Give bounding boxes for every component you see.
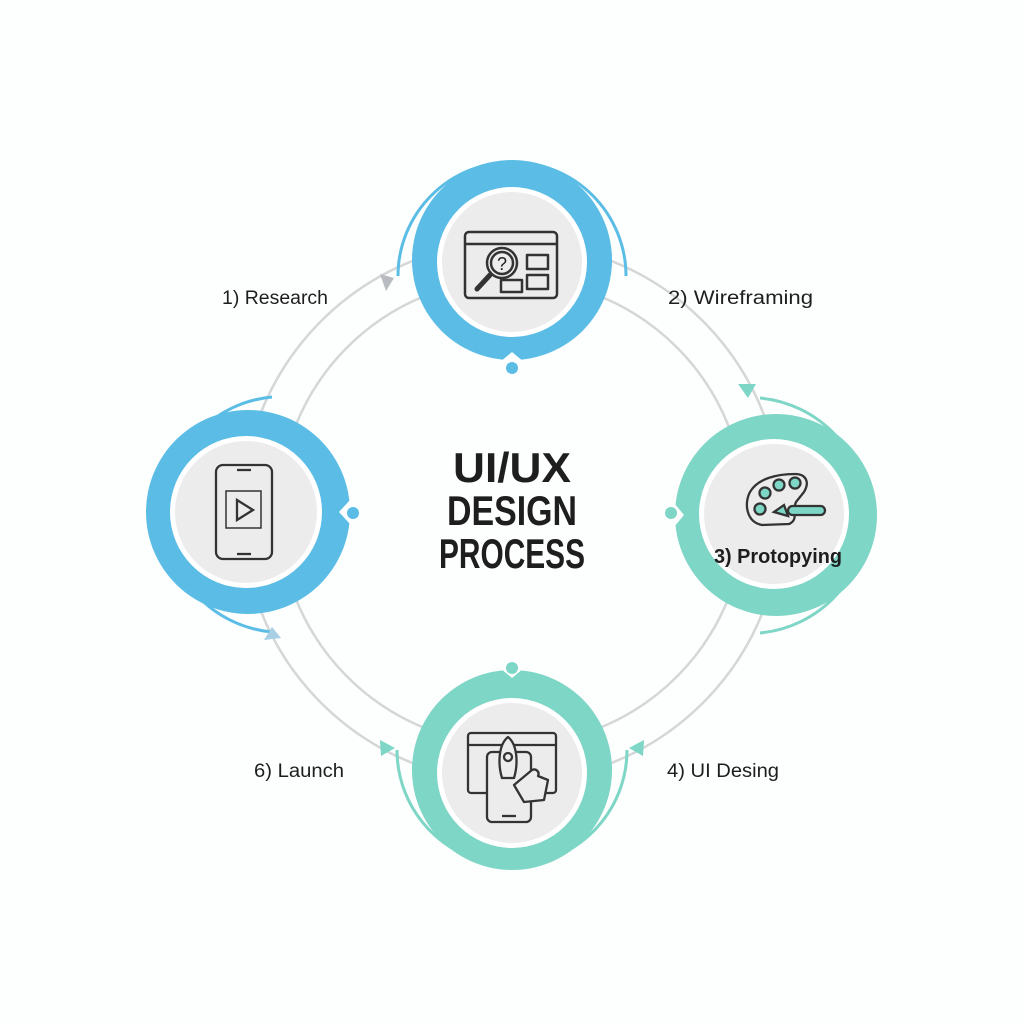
icon: rocket launch — [468, 733, 556, 822]
label: 2) Wireframing: 2) Wireframing — [668, 288, 813, 309]
icon: phone play — [216, 465, 272, 559]
title: DESIGN — [447, 487, 577, 534]
node: bottom (UI design) — [397, 662, 627, 870]
title: UI/UX — [453, 444, 571, 491]
label: 4) UI Desing: 4) UI Desing — [667, 761, 779, 782]
title: PROCESS — [439, 530, 585, 577]
node: top (research) — [398, 160, 626, 374]
label: 3) Protopying: 3) Protopying — [714, 546, 842, 568]
icon: browser magnifier: ? — [497, 254, 507, 274]
icon: browser magnifier — [465, 232, 557, 298]
title — [439, 444, 585, 577]
label: 6) Launch: 6) Launch — [254, 761, 344, 782]
gray connector rings — [242, 242, 782, 782]
label: 1) Research: 1) Research — [222, 288, 328, 309]
node: left (launch) — [146, 397, 359, 632]
arrows — [264, 274, 756, 756]
icon: palette — [747, 474, 825, 525]
node: right (prototyping) — [665, 398, 877, 633]
